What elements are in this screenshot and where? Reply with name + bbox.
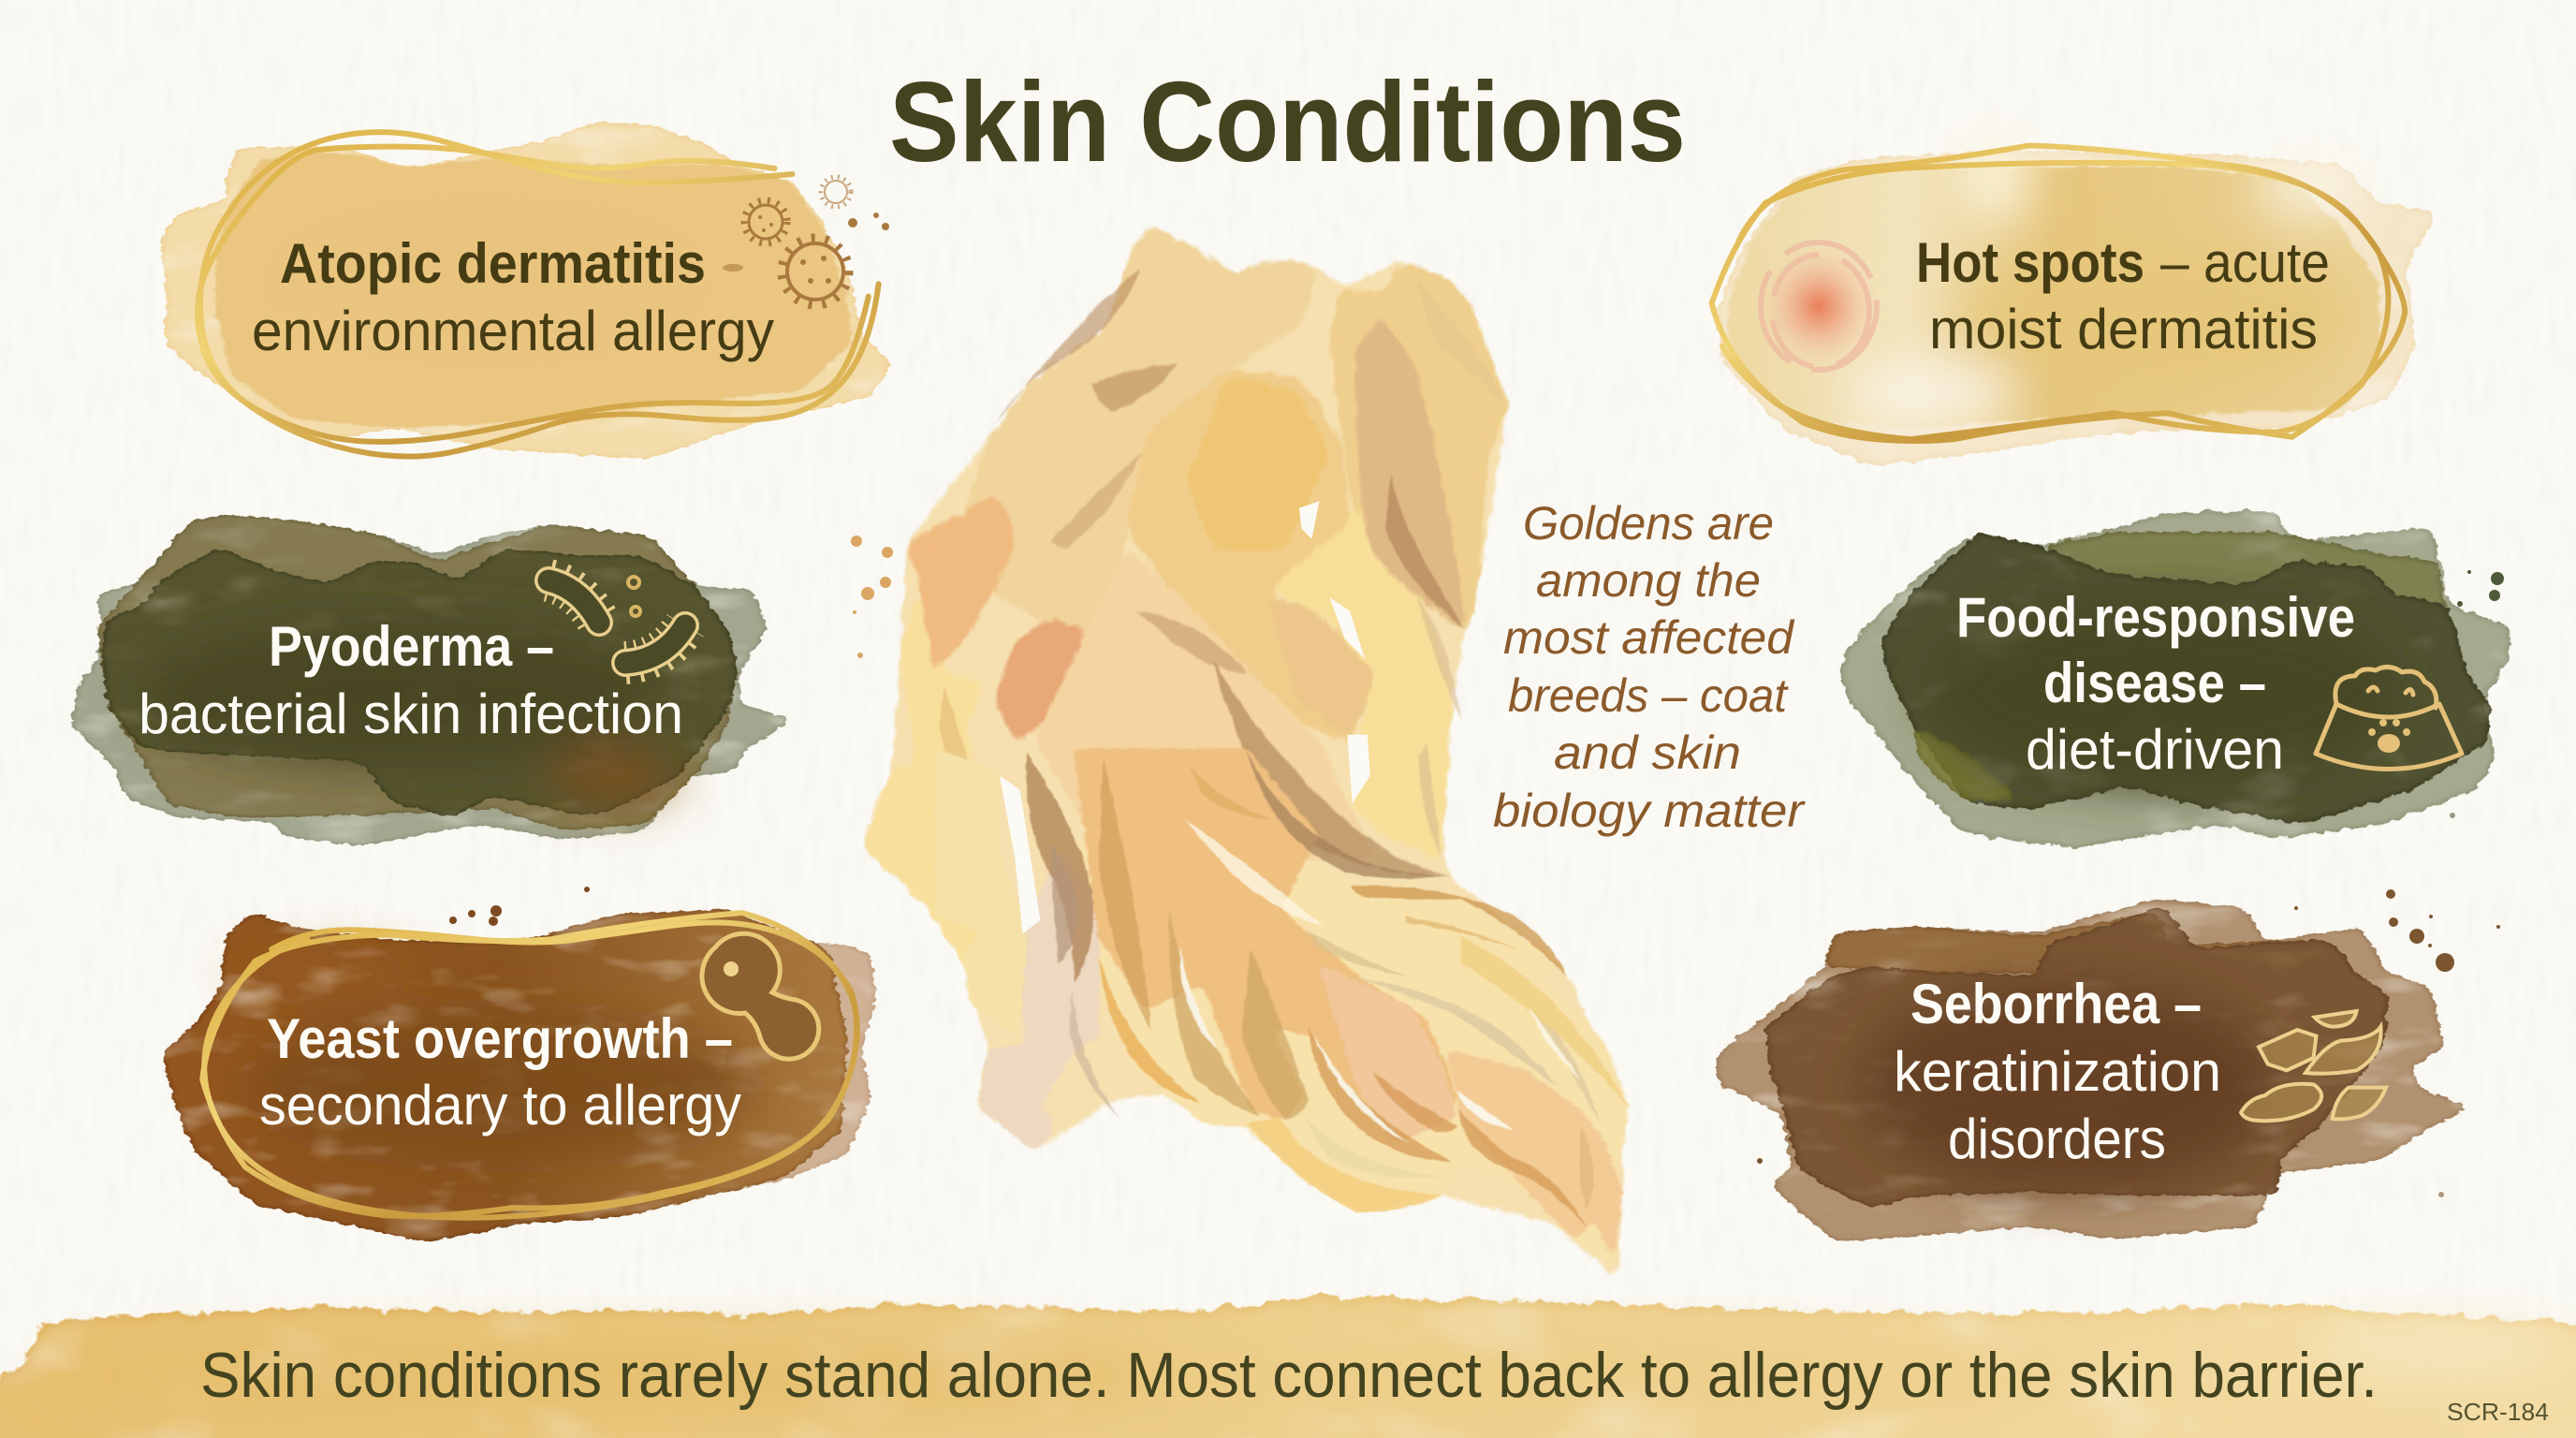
- callout: breed note: breeds – coat: [1508, 669, 1789, 722]
- label: pyoderma: Pyoderma –: [269, 615, 554, 678]
- label: food-responsive disease: disease –: [2043, 652, 2266, 714]
- label: hot spots: – acute: [2160, 231, 2330, 294]
- footer message: Skin conditions rarely stand alone. Most connect back to allergy or the skin barrier.: [200, 1340, 2378, 1411]
- gold ring frame: [198, 132, 879, 457]
- callout: breed note: [1493, 497, 1806, 837]
- icon: allergen virus particles: [723, 177, 889, 305]
- gold ring frame: [1712, 146, 2405, 441]
- label: atopic dermatitis: [252, 232, 774, 362]
- splatter: [2450, 570, 2504, 818]
- label: pyoderma: bacterial skin infection: [139, 682, 683, 745]
- callout: breed note: among the: [1536, 554, 1761, 607]
- icon: bacteria: [549, 577, 685, 663]
- reference code: SCR-184: [2447, 1398, 2549, 1426]
- label: food-responsive disease: [1956, 586, 2355, 781]
- label: seborrhea: [1894, 973, 2221, 1170]
- label: seborrhea: Seborrhea –: [1910, 973, 2202, 1035]
- label: pyoderma: [139, 615, 683, 745]
- label: yeast overgrowth: secondary to allergy: [259, 1074, 741, 1137]
- label: atopic dermatitis: environmental allergy: [252, 300, 774, 362]
- splatter: [449, 887, 590, 926]
- callout: breed note: and skin: [1554, 726, 1741, 779]
- label: atopic dermatitis: Atopic dermatitis: [280, 232, 706, 295]
- label: hot spots: moist dermatitis: [1929, 298, 2318, 360]
- gold ring frame: [202, 913, 857, 1218]
- panel: food-responsive disease: [1840, 511, 2512, 848]
- label: seborrhea: disorders: [1948, 1108, 2166, 1170]
- splatter near coat: [851, 536, 893, 658]
- label: yeast overgrowth: Yeast overgrowth –: [267, 1007, 733, 1070]
- panel: pyoderma: [72, 515, 793, 845]
- icon: hot spot lesion: [1761, 242, 1877, 370]
- callout: breed note: biology matter: [1493, 785, 1806, 837]
- label: hot spots: [1916, 231, 2330, 360]
- callout: breed note: Goldens are: [1523, 497, 1774, 550]
- title: Skin Conditions: [889, 58, 1686, 185]
- coat gaps: [1000, 501, 1370, 934]
- label: hot spots: Hot spots: [1916, 231, 2144, 294]
- label: yeast overgrowth: [259, 1007, 741, 1137]
- panel: seborrhea: [1717, 889, 2500, 1242]
- panel: yeast overgrowth: [162, 887, 875, 1242]
- callout: breed note: most affected: [1503, 611, 1795, 664]
- label: food-responsive disease: diet-driven: [2026, 718, 2284, 781]
- coat upper strands: [939, 268, 1507, 900]
- icon: budding yeast: [702, 933, 819, 1059]
- splatter: [1757, 889, 2500, 1197]
- icon: food bowl: [2316, 667, 2462, 770]
- panel: hot spots: [1712, 135, 2437, 465]
- coat lower body and tail: [936, 749, 1629, 1267]
- label: food-responsive disease: Food-responsive: [1956, 586, 2355, 649]
- footer band: [0, 1297, 2576, 1438]
- panel: atopic dermatitis: [161, 122, 891, 459]
- illustration: golden retriever watercolor coat: [863, 227, 1629, 1277]
- coat tail strands: [1026, 749, 1629, 1228]
- icon: skin flakes: [2241, 1011, 2386, 1121]
- label: seborrhea: keratinization: [1894, 1040, 2221, 1103]
